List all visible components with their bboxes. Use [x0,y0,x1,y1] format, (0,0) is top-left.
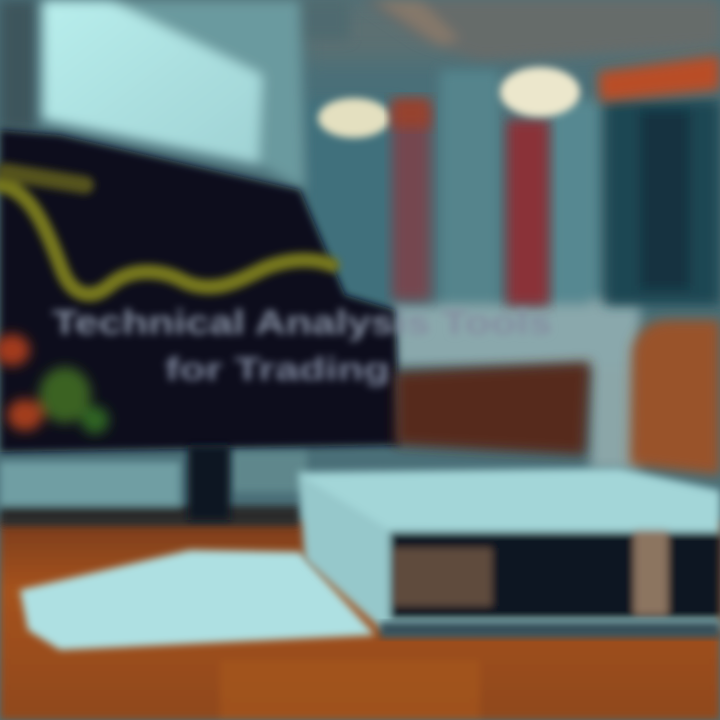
blurred title on monitor [52,304,552,387]
monitor [0,130,400,452]
orange accent by lamp [392,98,430,128]
pendant lamp left [318,98,390,138]
pendant lamp right [500,67,580,117]
wooden bench behind monitor [395,362,590,455]
blurred title on monitor: Technical Analysis Tools [52,304,552,342]
chart markers [0,334,109,434]
window [42,0,305,190]
monitor stand [188,445,230,520]
wall columns [0,0,640,470]
dark right panel [605,100,720,305]
ceiling [120,0,720,60]
line chart [0,172,332,294]
storage box [298,468,720,632]
red column right [507,120,549,305]
desk shadow under box [380,622,720,638]
monitor base shelf [0,452,307,526]
orange beam [598,55,720,102]
paper stack [20,550,375,650]
red column left [392,105,430,300]
wooden desk [0,520,720,720]
blurred title on monitor: for Trading [165,351,390,387]
leather chair [630,320,720,475]
